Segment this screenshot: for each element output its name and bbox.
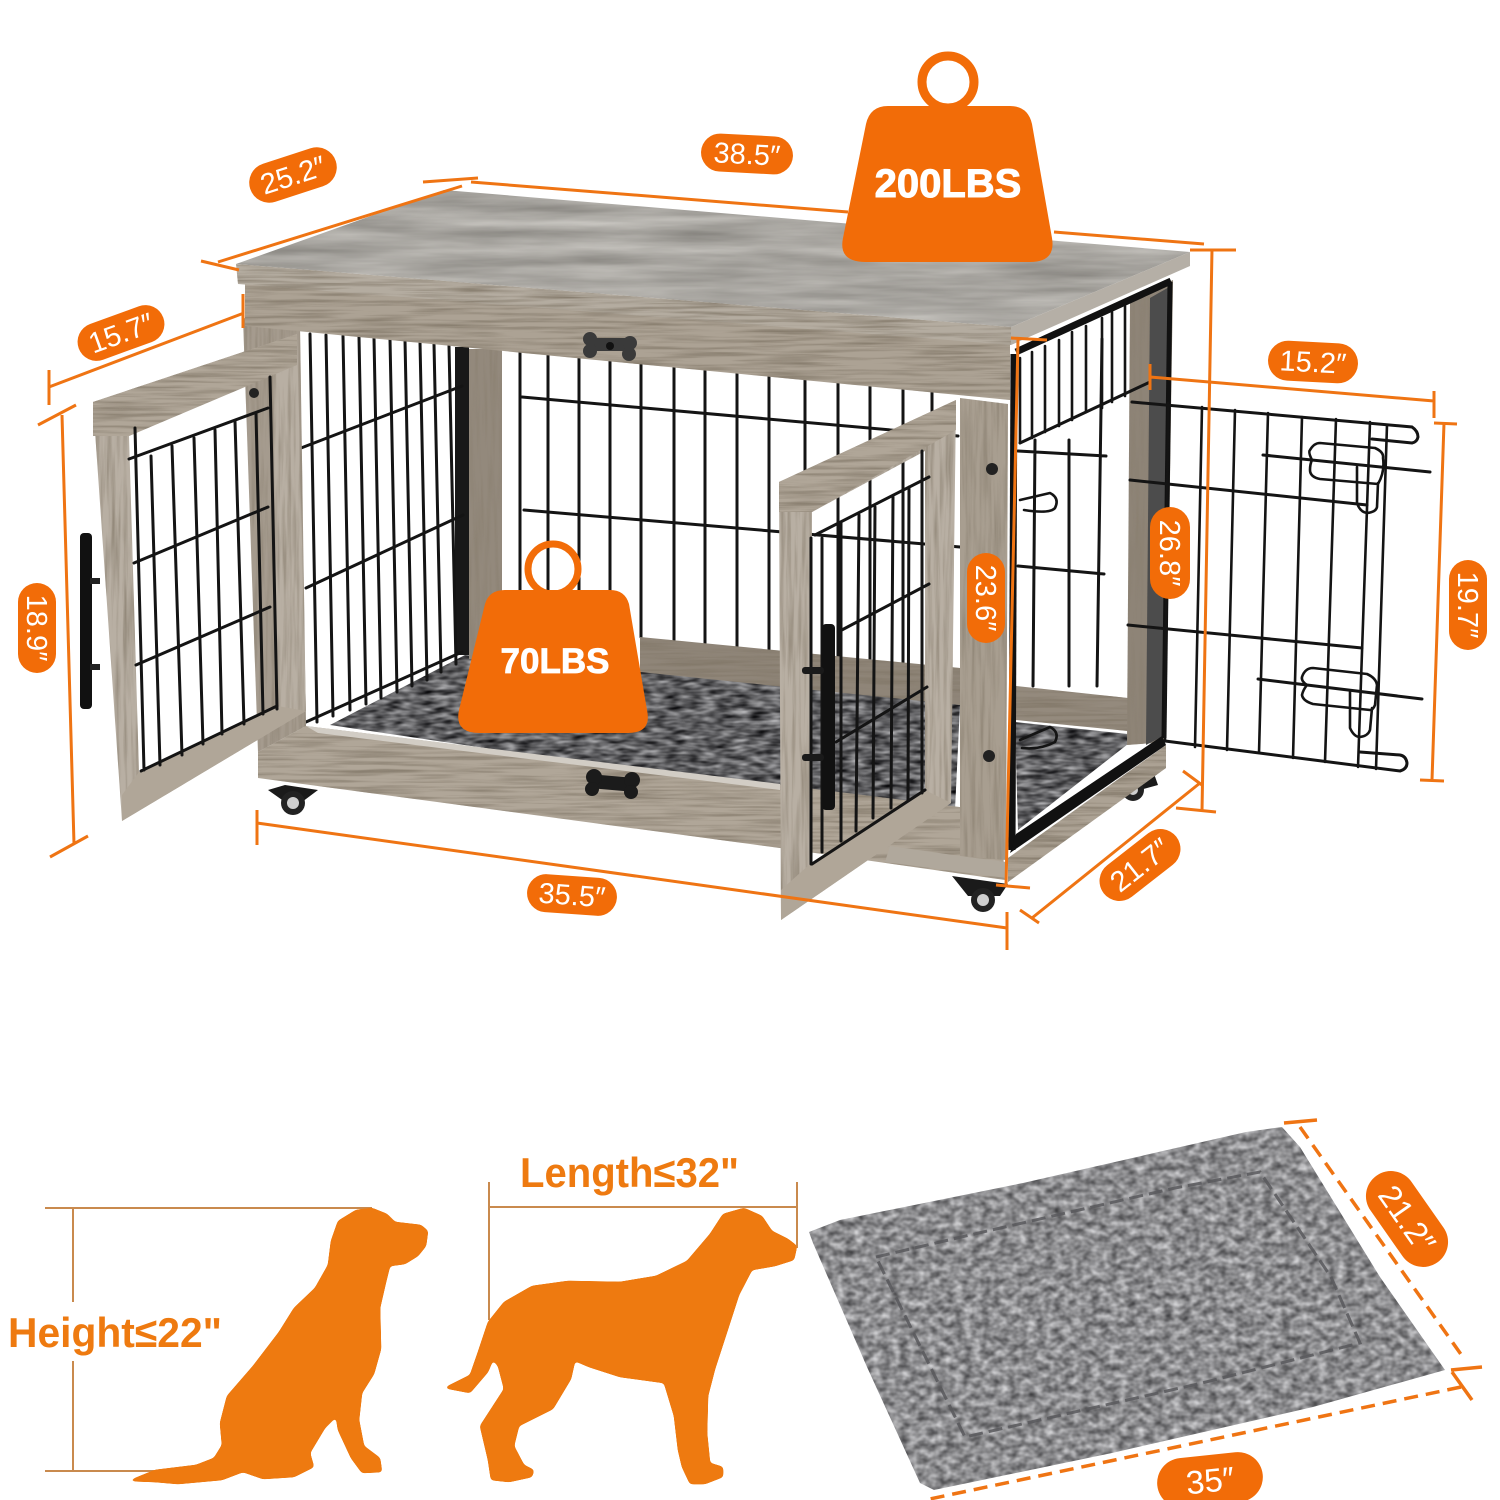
label: 35.5: 35.5″	[538, 878, 606, 914]
crate: back rail	[640, 637, 960, 705]
crate: right rear caster	[1120, 768, 1158, 801]
dimension line: 15.7	[49, 294, 244, 405]
label: 26.8	[1150, 507, 1190, 599]
dimension line: 38.5	[471, 182, 1236, 250]
label: 19.7	[1449, 560, 1487, 650]
label: 21.7	[1091, 821, 1189, 909]
dimension line: 25.2	[201, 178, 478, 270]
crate: right front post	[885, 398, 1008, 878]
label: 15.7	[72, 300, 170, 366]
label: 21.2	[1356, 1161, 1458, 1277]
icon: 200LBS weight: 200LBS	[875, 162, 1021, 206]
dashed dimension: 21.2	[1284, 1120, 1482, 1400]
crate: right side cushion	[1015, 722, 1128, 830]
dimension lines	[38, 178, 1457, 950]
crate: left wire panel	[301, 334, 463, 722]
label: 25.2	[244, 142, 342, 208]
label: 35	[1155, 1450, 1265, 1500]
dimension line: 19.7	[1420, 423, 1457, 781]
left door wires	[129, 377, 277, 771]
label: 15.2: 15.2″	[1279, 345, 1347, 381]
cushion	[809, 1127, 1445, 1490]
crate: tabletop	[236, 190, 1190, 345]
height measure bracket	[45, 1208, 372, 1471]
middle door wires	[811, 451, 929, 864]
crate: opened wire side door	[1128, 402, 1430, 771]
crate: left front post strip	[243, 318, 306, 752]
left door handle	[80, 533, 100, 709]
label: 15.2	[1267, 340, 1359, 384]
length measure bracket	[489, 1182, 797, 1320]
label: 19.7: 19.7″	[1451, 572, 1483, 638]
icon: 200LBS weight	[842, 56, 1053, 262]
middle door handle	[802, 624, 835, 810]
crate: right front caster	[952, 876, 1008, 912]
crate: right side rear rail	[1016, 686, 1128, 731]
icon: upper bone latch	[583, 332, 637, 361]
crate: left caster	[268, 785, 318, 815]
icon: sitting dog silhouette	[128, 1208, 428, 1484]
crate: inner rear post	[455, 347, 502, 659]
label: 26.8: 26.8″	[1153, 520, 1185, 586]
label: 38.5	[700, 133, 794, 175]
crate: right side black frame	[1010, 281, 1171, 853]
dimension line: 15.2	[1150, 364, 1434, 418]
icon: lower bone latch	[585, 769, 640, 799]
crate: bottom rail top highlight	[306, 726, 780, 790]
crate: left open door	[80, 334, 306, 821]
label: 18.9: 18.9″	[20, 595, 52, 661]
crate: floor cushion inside	[330, 655, 960, 810]
label: 18.9	[18, 583, 56, 673]
cushion stitching	[876, 1172, 1360, 1437]
dimension line: 35.5	[257, 810, 1007, 950]
label: 23.6: 23.6″	[969, 565, 1001, 631]
label: 21.7: 21.7″	[1104, 833, 1177, 899]
dimension line: 18.9	[38, 405, 88, 857]
dimension line: overall height	[1176, 249, 1216, 812]
label: 35.5	[526, 873, 618, 917]
crate: apron under tabletop	[245, 280, 1010, 400]
length label: Length≤32"	[520, 1149, 739, 1196]
label: 23.6	[967, 553, 1005, 643]
crate: front bottom rail	[258, 726, 1005, 880]
height label: Height≤22"	[8, 1309, 222, 1356]
dimension line: 23.6	[996, 338, 1047, 888]
crate: right rear post	[1127, 280, 1173, 745]
icon: 70LBS weight	[458, 544, 648, 733]
crate: right side bottom board	[1008, 745, 1166, 882]
dimension line: 21.7	[1020, 771, 1202, 923]
label: 15.7: 15.7″	[85, 307, 158, 360]
icon: 70LBS weight: 70LBS	[501, 642, 609, 681]
dashed dimension: 35	[925, 1387, 1461, 1500]
icon: standing dog silhouette	[444, 1208, 797, 1484]
label: 25.2: 25.2″	[257, 150, 330, 201]
label: 21.2: 21.2″	[1371, 1179, 1443, 1259]
label: 38.5: 38.5″	[713, 137, 781, 173]
crate: right side upper wires	[1018, 306, 1150, 748]
crate: back wall wires	[520, 352, 960, 665]
crate: front-middle open door	[779, 400, 956, 920]
